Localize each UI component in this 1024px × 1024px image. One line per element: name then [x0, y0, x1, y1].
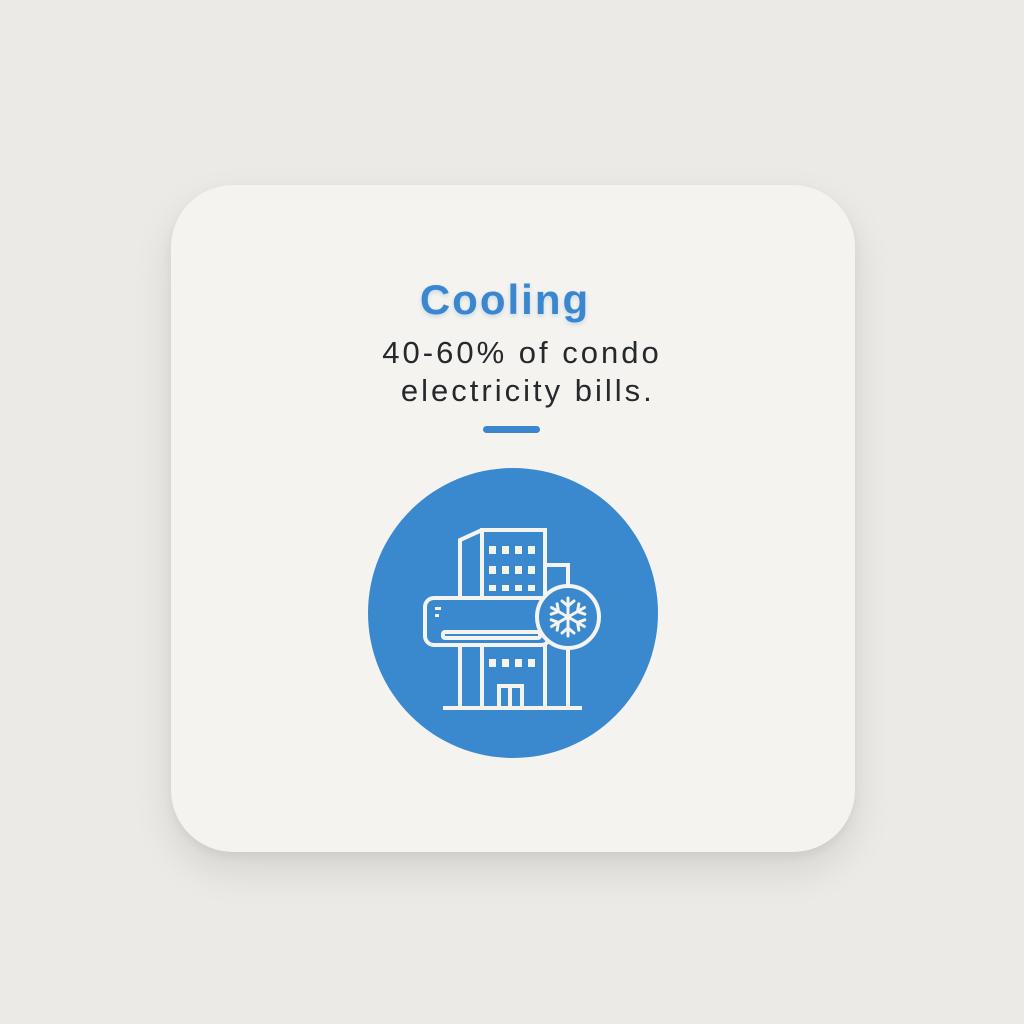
description text: 40-60% of condo — [382, 335, 662, 370]
title: Cooling — [420, 276, 590, 323]
accent dash — [483, 426, 540, 433]
icon: snowflake badge — [537, 586, 599, 648]
description text — [382, 335, 662, 408]
description text: electricity bills. — [401, 373, 655, 408]
card panel — [171, 185, 855, 852]
